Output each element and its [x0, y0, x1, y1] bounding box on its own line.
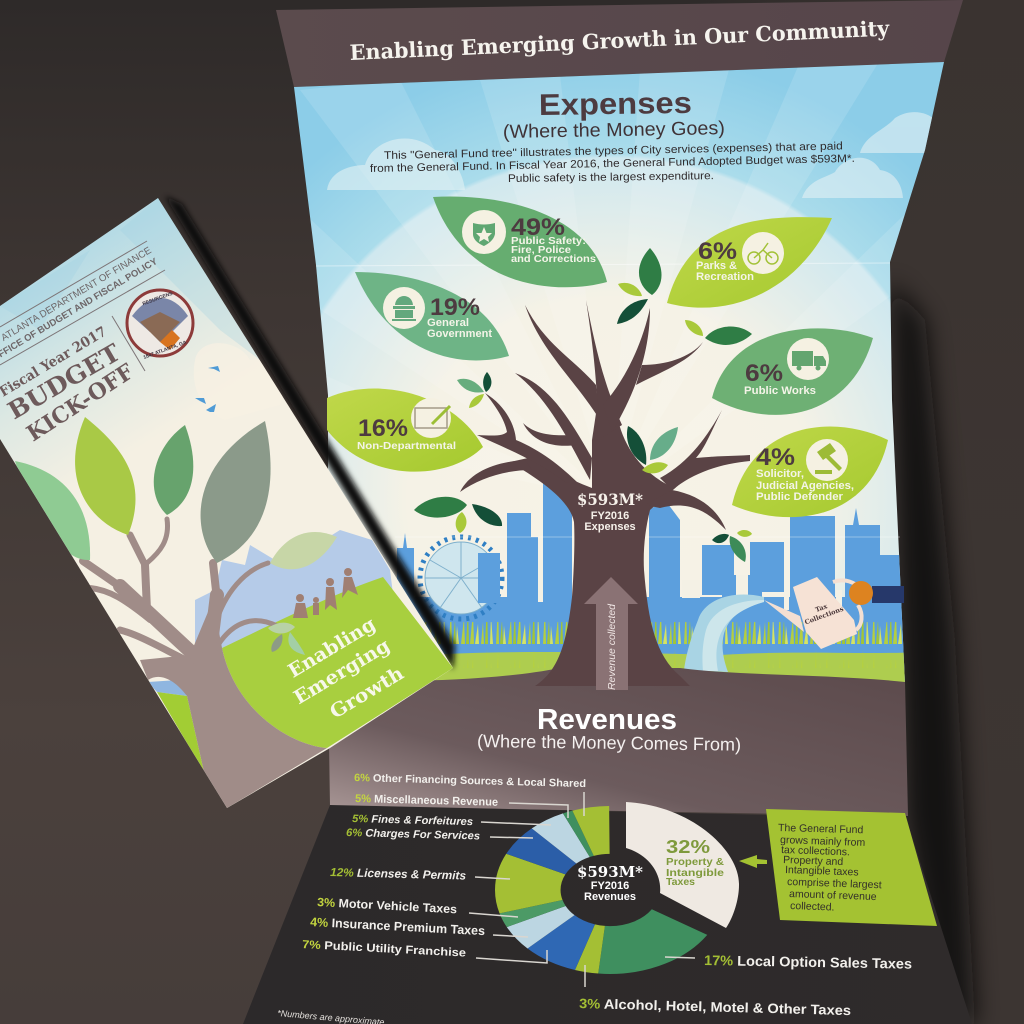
intro paragraph: Public safety is the largest expenditure.	[508, 170, 714, 185]
subheading: revenues: (Where the Money Comes From)	[477, 731, 741, 755]
intro paragraph: from the General Fund. In Fiscal Year 2016, the General Fund Adopted Budget was $593M*.	[370, 153, 855, 175]
brochure skyline	[195, 530, 400, 650]
tree branches	[586, 300, 622, 440]
heading: expenses: Expenses	[539, 87, 692, 122]
revenue category labels: 3% Motor Vehicle Taxes	[317, 895, 458, 916]
leaf: solicitor 4%	[732, 427, 888, 517]
brochure birds	[195, 366, 220, 412]
brochure sky pattern	[0, 198, 260, 360]
leaf: parks and recreation 6%	[667, 217, 832, 308]
leader lines	[469, 792, 695, 987]
center expenses label: $593M*	[577, 490, 644, 509]
leaf: parks and recreation 6%: 6%	[698, 238, 737, 265]
arrow: revenue collected	[584, 577, 638, 690]
brochure title: BUDGET	[3, 338, 125, 425]
heading: revenues: Revenues	[537, 704, 677, 736]
leaf: public safety 49%: Public Safety:	[511, 236, 586, 247]
brochure tagline: Enabling	[284, 613, 380, 683]
leaf: public safety 49%: Fire, Police	[511, 245, 571, 256]
leaf: public safety 49%	[433, 196, 607, 287]
revenue category labels: 12% Licenses & Permits	[330, 866, 467, 883]
grass	[420, 622, 920, 668]
revenue category labels: 6% Other Financing Sources & Local Shared	[354, 772, 586, 790]
donut center label	[577, 863, 643, 903]
tree	[460, 300, 750, 686]
callout: general fund note: Property and	[783, 854, 844, 868]
donut center label: FY2016	[591, 880, 629, 892]
callout: general fund note: amount of revenue	[789, 888, 877, 903]
callout: general fund note: grows mainly from	[780, 834, 866, 849]
revenue category labels: 3% Alcohol, Hotel, Motel & Other Taxes	[579, 996, 851, 1018]
brochure small leaves	[268, 623, 305, 655]
leaf: general government 19%: 19%	[430, 294, 480, 321]
revenue category labels: 6% Charges For Services	[346, 827, 480, 843]
slice: property and intangible taxes	[626, 802, 739, 928]
brochure tagline: Emerging	[290, 635, 394, 709]
revenue category labels	[302, 772, 912, 1018]
leaf: general government 19%	[355, 272, 509, 360]
intro paragraph: This "General Fund tree" illustrates the types of City services (expenses) that are paid	[384, 140, 843, 162]
arrow: revenue collected: Revenue collected	[606, 603, 618, 690]
callout: general fund note: The General Fund	[778, 822, 864, 836]
brochure title: Fiscal Year 2017	[0, 324, 110, 400]
center expenses label: Expenses	[584, 521, 636, 533]
leaf: general government 19%: Government	[427, 328, 492, 340]
shadow behind unfolded sheet	[890, 280, 975, 1024]
header band	[276, 0, 963, 87]
ferris wheel	[420, 537, 502, 619]
seal of atlanta	[127, 290, 193, 361]
fold crease upper	[316, 263, 890, 266]
brochure trunk	[140, 600, 327, 808]
leaf: non-departmental 16%	[327, 389, 483, 472]
intro paragraph	[370, 140, 855, 185]
property tax label: 32%	[666, 837, 710, 857]
leaf: solicitor 4%: 4%	[756, 444, 795, 471]
leaf: non-departmental 16%: Non-Departmental	[357, 440, 456, 452]
leaf: public works 6%: 6%	[745, 360, 783, 387]
revenue category labels: 4% Insurance Premium Taxes	[310, 915, 485, 938]
donut center label: $593M*	[577, 863, 643, 881]
seal of atlanta: 1847 ATLANTA, GA.	[143, 339, 189, 361]
brochure leaves	[15, 417, 337, 569]
leaf: public works 6%: Public Works	[744, 385, 816, 397]
water stream	[684, 595, 764, 672]
callout: general fund note: Intangible taxes	[785, 864, 859, 879]
brochure title: KICK-OFF	[22, 359, 139, 447]
brochure small green wedge	[157, 692, 204, 772]
title: Enabling Emerging Growth in Our Community	[349, 15, 890, 65]
tree trunk	[510, 400, 712, 686]
leaf: solicitor 4%: Public Defender	[756, 491, 844, 503]
leaf: parks and recreation 6%: Recreation	[696, 271, 754, 283]
brochure blue sliver	[148, 680, 187, 696]
brochure tree	[83, 519, 327, 808]
subheading: expenses: (Where the Money Goes)	[503, 118, 725, 143]
leaf: public safety 49%: 49%	[511, 214, 565, 241]
shadow under brochure	[165, 196, 455, 670]
icon: watering can	[764, 577, 904, 649]
leaf: general government 19%: General	[427, 317, 469, 329]
callout: general fund note	[766, 809, 937, 926]
revenue category labels: 17% Local Option Sales Taxes	[704, 952, 912, 972]
skyline	[397, 484, 905, 682]
leaf: solicitor 4%: Judicial Agencies,	[756, 480, 854, 492]
leaf: solicitor 4%: Solicitor,	[756, 468, 804, 480]
lower revenue area upper half	[328, 668, 908, 816]
property tax label: Intangible	[666, 867, 724, 879]
icon: watering can: Collections	[804, 605, 845, 626]
panel: budget kick-off brochure	[0, 190, 460, 820]
property tax label: Taxes	[666, 876, 695, 888]
property tax label	[666, 837, 724, 888]
leaf: non-departmental 16%: 16%	[358, 415, 408, 442]
arrow: callout pointer	[739, 855, 767, 868]
center expenses label: FY2016	[591, 510, 629, 522]
seal of atlanta: RESURGENS	[142, 291, 174, 307]
panel: unfolded budget sheet	[243, 0, 972, 1024]
donut center label: Revenues	[584, 891, 636, 903]
leaf: public works 6%	[712, 328, 873, 415]
brochure green hill	[222, 577, 453, 748]
brochure title	[0, 326, 130, 442]
callout: general fund note: collected.	[790, 900, 835, 914]
sky panel with rays and clouds	[280, 50, 960, 690]
small leaves	[414, 248, 752, 562]
donut chart: revenues	[528, 802, 739, 950]
brochure people	[293, 568, 358, 618]
revenue category labels: 5% Fines & Forfeitures	[352, 813, 473, 828]
icon: watering can: Tax	[814, 602, 829, 614]
revenue category labels: 5% Miscellaneous Revenue	[355, 793, 498, 809]
property tax label: Property &	[666, 856, 724, 868]
background right side tone	[700, 0, 1024, 1024]
brochure tagline	[286, 620, 405, 716]
brochure branches	[83, 519, 277, 668]
center expenses label	[577, 490, 644, 533]
leaf: public safety 49%: and Corrections	[511, 254, 596, 265]
leaf: parks and recreation 6%: Parks &	[696, 260, 737, 272]
brochure tagline: Growth	[326, 662, 408, 723]
lower revenue area dark fold	[243, 805, 972, 1024]
revenue category labels: 7% Public Utility Franchise	[302, 939, 466, 960]
callout: general fund note: tax collections.	[781, 844, 850, 858]
callout: general fund note: comprise the largest	[787, 876, 882, 891]
fold crease middle	[395, 536, 900, 538]
